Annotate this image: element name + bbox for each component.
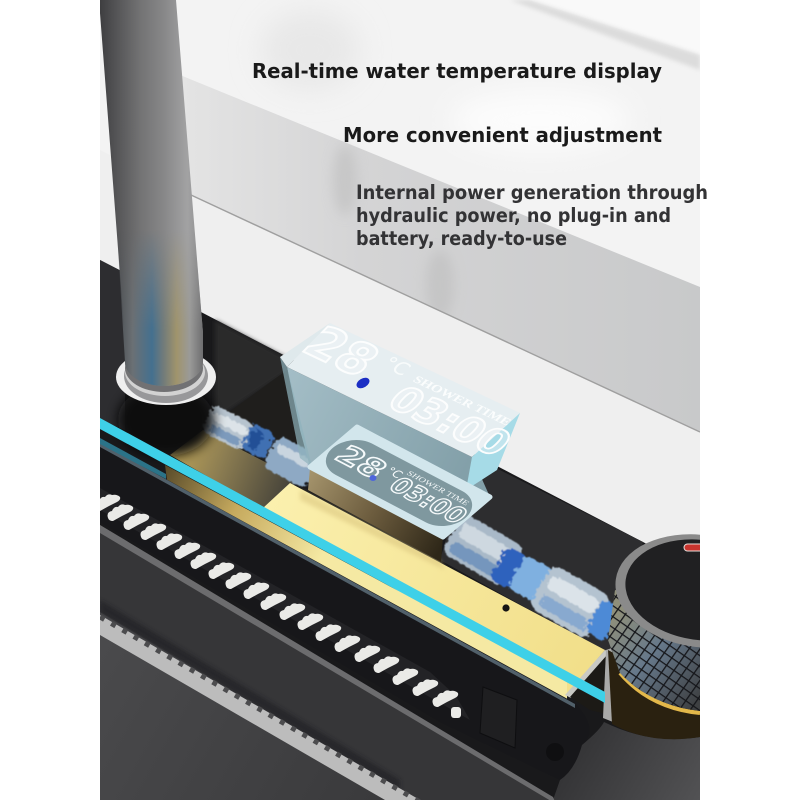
screen unit: °C (383, 465, 406, 481)
control knob (608, 534, 700, 740)
screen temperature reading: 28 (327, 440, 394, 485)
projected label: SHOWER TIME (410, 373, 515, 428)
black lower deck band (100, 444, 575, 708)
black sink deck (100, 260, 700, 800)
display prism back face (287, 367, 490, 497)
screen blue droplet (370, 475, 376, 481)
rocker switch (480, 687, 517, 748)
water tube, right section (444, 516, 614, 642)
screen timer: 03:00 (382, 473, 474, 529)
caption: adjustment: More convenient adjustment (343, 123, 662, 147)
grey faucet body (553, 722, 700, 800)
caption: hydraulic power: Internal power generation through (356, 181, 708, 204)
knurled side (608, 590, 700, 711)
caption: temperature display: Real-time water temperature display (252, 59, 662, 83)
projected timer: 03:00 (378, 379, 520, 464)
caption: hydraulic power (356, 181, 708, 250)
yellow gold plate (165, 465, 610, 700)
caption: hydraulic power: hydraulic power, no plug-in and (356, 204, 671, 227)
product infographic: faucet with digital temperature display (100, 0, 707, 800)
display unit (280, 316, 520, 562)
projected temperature reading: 28 (292, 316, 392, 386)
faucet pipe (99, 0, 203, 386)
red indicator (684, 544, 704, 551)
recessed channel with gold base (170, 374, 295, 507)
water tube, left section (203, 405, 310, 488)
display prism left glass (280, 357, 309, 464)
display screen (326, 440, 472, 526)
display base plate (310, 427, 490, 537)
faucet base ring and shadow (116, 344, 216, 456)
leather lower panel (100, 525, 556, 800)
stitched white seam (100, 615, 420, 800)
mounting screw (546, 743, 564, 761)
marble block front face (180, 75, 700, 432)
caption: hydraulic power: battery, ready-to-use (356, 227, 567, 250)
row of white spray nozzles (94, 488, 470, 720)
lower marble ledge (428, 307, 447, 318)
gold light ring (620, 673, 700, 713)
knob black top (619, 530, 781, 650)
knob cup (608, 650, 700, 739)
display prism top glass (287, 323, 520, 457)
feature captions (252, 59, 708, 250)
marble countertop background (100, 0, 700, 544)
screw hole in plate (502, 604, 510, 612)
knob metal rim (608, 524, 792, 658)
cyan glass light strip (100, 418, 605, 703)
screen label: SHOWER TIME (404, 469, 472, 507)
silver post and dark gap at plate end (570, 648, 613, 722)
projected unit: °C (378, 352, 416, 380)
projected blue droplet (356, 378, 370, 388)
display prism side glass (466, 413, 520, 490)
display gold front edge (308, 468, 443, 562)
